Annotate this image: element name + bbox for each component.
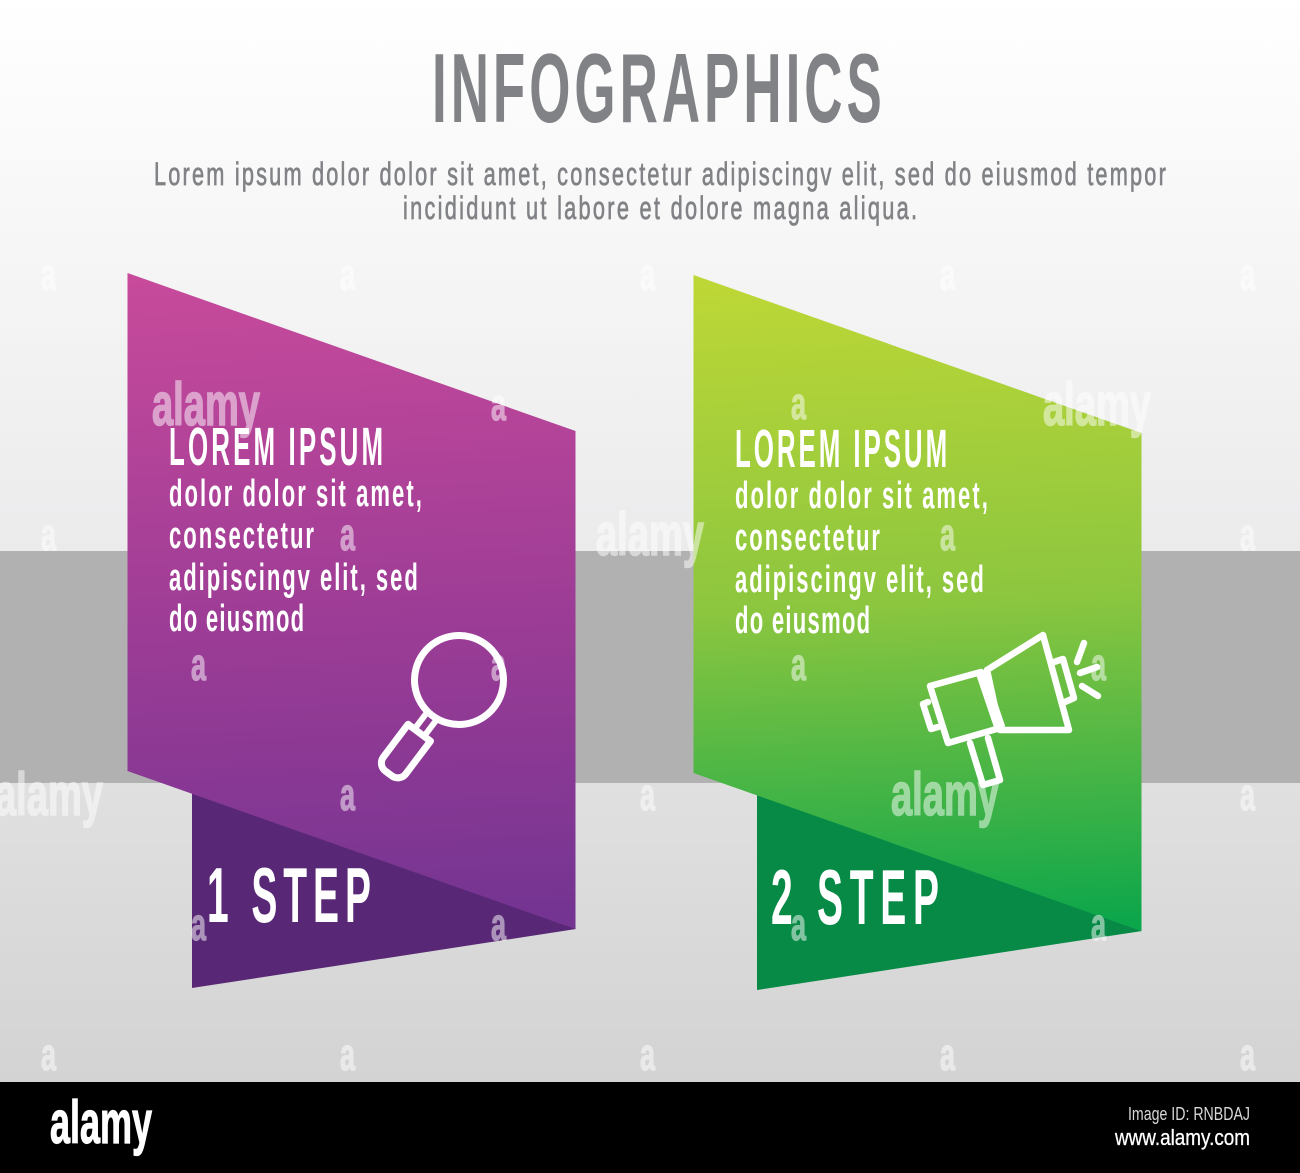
watermark overlay: a <box>340 769 355 820</box>
step 1 label: 1 STEP <box>207 852 371 940</box>
watermark overlay: a <box>1240 769 1255 820</box>
footer bar <box>0 1082 1300 1173</box>
step 2 heading: LOREM IPSUM <box>735 419 947 478</box>
step 2 main shape <box>694 275 1142 931</box>
step 2 body text <box>735 474 988 642</box>
watermark overlay: a <box>1091 899 1106 950</box>
step 1 body text <box>169 472 422 640</box>
watermark overlay: a <box>1091 639 1106 690</box>
step 1 tab <box>192 792 576 988</box>
watermark overlay: a <box>41 1029 56 1080</box>
watermark overlay: a <box>491 899 506 950</box>
watermark overlay: a <box>1240 249 1255 300</box>
watermark overlay: a <box>640 249 655 300</box>
watermark overlay: a <box>1240 509 1255 560</box>
icon: magnifying glass <box>353 618 521 800</box>
watermark overlay: a <box>491 639 506 690</box>
subtitle text: incididunt ut labore et dolore magna aliqua. <box>403 190 917 226</box>
footer logo: alamy <box>50 1089 152 1156</box>
website: www.alamy.com <box>1114 1125 1250 1150</box>
step 1 body text: dolor dolor sit amet, <box>169 472 422 515</box>
step 1 body text: consectetur <box>169 514 314 557</box>
watermark overlay: a <box>340 509 355 560</box>
watermark overlay: a <box>940 1029 955 1080</box>
watermark overlay: a <box>640 769 655 820</box>
step 2 body text: consectetur <box>735 516 880 559</box>
image id: Image ID: RNBDAJ <box>1128 1104 1250 1124</box>
watermark overlay: a <box>940 249 955 300</box>
watermark overlay: a <box>1240 1029 1255 1080</box>
step 1 main shape <box>128 273 576 929</box>
watermark overlay: a <box>640 1029 655 1080</box>
watermark overlay: a <box>791 378 806 429</box>
icon: megaphone <box>923 635 1098 785</box>
watermark overlay: a <box>791 899 806 950</box>
subtitle text: Lorem ipsum dolor dolor sit amet, consectetur adipiscingv elit, sed do eiusmod tempor <box>154 156 1166 192</box>
watermark overlay: a <box>940 509 955 560</box>
step 1 body text: adipiscingv elit, sed <box>169 556 418 599</box>
watermark overlay: a <box>191 639 206 690</box>
watermark overlay: a <box>41 249 56 300</box>
watermark overlay: alamy <box>1043 371 1151 438</box>
watermark overlay: a <box>340 249 355 300</box>
step 2 label: 2 STEP <box>771 854 939 942</box>
watermark overlay: alamy <box>596 501 704 568</box>
panel: step 1 <box>128 273 576 988</box>
step 2 body text: adipiscingv elit, sed <box>735 558 984 601</box>
subtitle text <box>154 156 1166 226</box>
watermark overlay: a <box>191 899 206 950</box>
step 1 heading: LOREM IPSUM <box>169 417 383 476</box>
panel: step 2 <box>694 275 1142 990</box>
watermark overlay <box>0 249 1255 1080</box>
watermark overlay: a <box>340 1029 355 1080</box>
watermark overlay: a <box>41 509 56 560</box>
watermark overlay: alamy <box>891 761 999 828</box>
step 2 body text: do eiusmod <box>735 599 870 642</box>
title: INFOGRAPHICS <box>432 34 882 143</box>
step 1 body text: do eiusmod <box>169 597 304 640</box>
watermark overlay: a <box>791 639 806 690</box>
watermark overlay: a <box>491 379 506 430</box>
watermark overlay: alamy <box>0 761 103 828</box>
step 2 body text: dolor dolor sit amet, <box>735 474 988 517</box>
step 2 tab <box>757 794 1142 990</box>
watermark overlay: alamy <box>152 371 260 438</box>
